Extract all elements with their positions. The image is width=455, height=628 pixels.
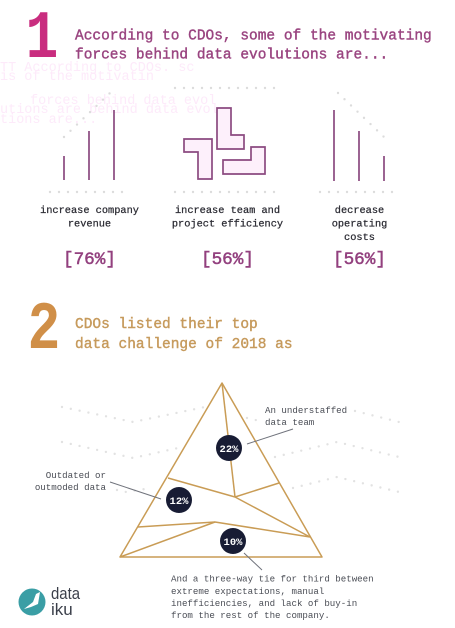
label: understaffed team: data team xyxy=(265,417,315,428)
label: costs: operating xyxy=(332,218,387,230)
icon: falling bars xyxy=(334,110,384,181)
label: revenue: increase company xyxy=(40,205,139,217)
label: costs: decrease xyxy=(335,205,384,217)
label: three-way tie: extreme expectations, manual xyxy=(171,586,324,597)
label: three-way tie: And a three-way tie for third between xyxy=(171,574,374,584)
badge: 22% xyxy=(216,435,242,461)
label: costs: costs xyxy=(344,232,375,244)
icon: bird xyxy=(18,588,46,616)
badge: 22%: 22% xyxy=(220,444,239,456)
faded ghost text: TT According to CDOs. sc xyxy=(0,61,194,76)
label: understaffed team: An understaffed xyxy=(265,405,347,416)
label: outdated data: Outdated or xyxy=(46,470,106,481)
leader lines xyxy=(110,429,293,570)
label: three-way tie: inefficiencies, and lack of buy-in xyxy=(171,598,357,609)
label: outdated data: outmoded data xyxy=(35,482,107,493)
logo: dataiku: data xyxy=(51,584,80,603)
faded ghost text: utions are behind data evol xyxy=(0,103,219,118)
label: revenue xyxy=(40,205,139,230)
badge: 12%: 12% xyxy=(170,496,189,508)
heading: section 1: forces behind data evolutions are... xyxy=(75,48,388,64)
numeral 2: 2 xyxy=(28,293,60,369)
badge: 10%: 10% xyxy=(224,537,243,549)
icon: interlocking blocks xyxy=(184,108,265,179)
faded ghost text: forces behind data evol xyxy=(30,94,216,109)
heading: section 1 xyxy=(75,28,432,64)
label: revenue: revenue xyxy=(68,218,111,230)
label: costs xyxy=(332,205,387,244)
label: efficiency: project efficiency xyxy=(172,218,283,230)
heading: section 2: CDOs listed their top xyxy=(75,317,258,333)
icon: rising bars xyxy=(64,110,114,180)
label: efficiency: increase team and xyxy=(175,205,280,217)
faded ghost text: is of the motivatin xyxy=(0,70,154,85)
label: efficiency xyxy=(172,205,283,230)
triangle chart xyxy=(120,383,322,557)
label: three-way tie: from the rest of the company. xyxy=(171,610,330,621)
logo: dataiku xyxy=(18,584,80,619)
faded ghost text xyxy=(0,61,219,128)
label: understaffed team xyxy=(265,405,347,428)
label: three-way tie xyxy=(171,574,374,621)
dotted waves: section 2 xyxy=(62,407,399,492)
heading: section 1: According to CDOs, some of the motivating xyxy=(75,28,432,44)
dotted frame: section 1 xyxy=(50,88,395,192)
stat: 76%: [76%] xyxy=(63,250,116,270)
badge: 12% xyxy=(166,487,192,513)
numeral 1: 1 xyxy=(26,2,58,78)
label: outdated data xyxy=(35,470,107,493)
stat: 56% costs: [56%] xyxy=(333,250,386,270)
stat: 56% efficiency: [56%] xyxy=(201,250,254,270)
badge: 10% xyxy=(220,528,246,554)
heading: section 2: data challenge of 2018 as xyxy=(75,337,293,353)
faded ghost text: tions are... xyxy=(0,113,97,128)
logo: dataiku: iku xyxy=(51,600,73,619)
heading: section 2 xyxy=(75,317,293,353)
